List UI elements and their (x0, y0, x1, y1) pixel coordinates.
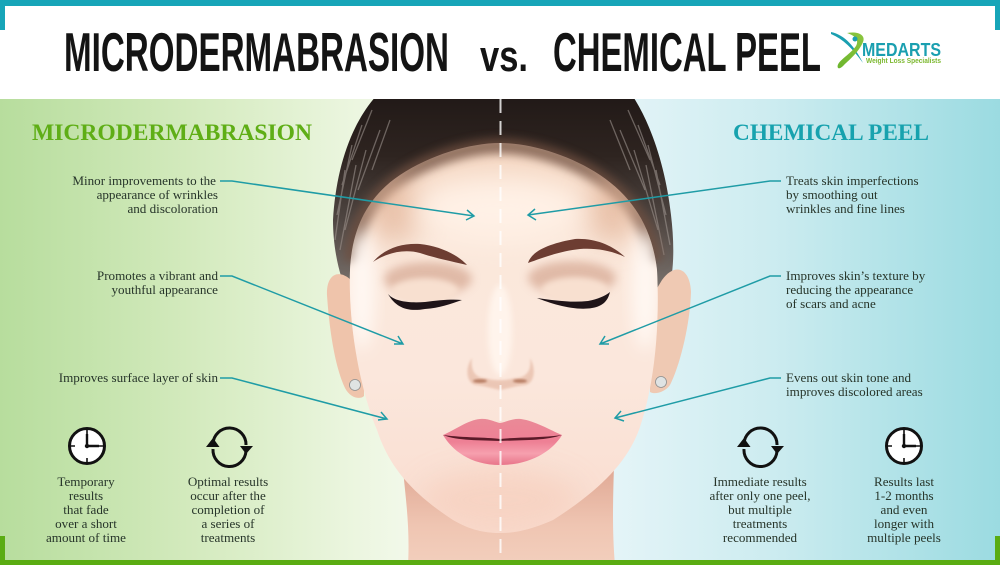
right ear (650, 270, 691, 393)
text: left benefit 1: appearance of wrinkles (97, 187, 218, 202)
text: optimal results: treatments (201, 530, 255, 545)
arrow: right 1 (528, 181, 781, 220)
logo: Medarts: MEDARTS (862, 40, 941, 60)
text: right benefit 2: of scars and acne (786, 296, 876, 311)
left ear (327, 274, 364, 398)
text: immediate results: recommended (723, 530, 798, 545)
eyelid right (541, 275, 608, 296)
nose (467, 285, 534, 390)
text: optimal results: Optimal results (188, 474, 268, 489)
text: results last: longer with (874, 516, 934, 531)
heading: microdermabrasion: MICRODERMABRASION (32, 120, 312, 145)
icon: cycle right (737, 428, 784, 467)
right earring (656, 376, 666, 388)
text: optimal results: completion of (191, 502, 265, 517)
frame: bottom green bracket (0, 536, 1000, 565)
icon: cycle left (206, 428, 253, 467)
soft hairline (352, 146, 655, 262)
logo: Medarts: Weight Loss Specialists (866, 58, 941, 65)
arrow: left 3 (220, 378, 387, 420)
panel: left green background (0, 99, 420, 565)
title: CHEMICAL PEEL (553, 21, 821, 83)
text: results last: multiple peels (867, 530, 941, 545)
frame: top teal bracket (0, 0, 1000, 30)
eye shadow left (384, 262, 472, 296)
text: immediate results: after only one peel, (709, 488, 811, 503)
text: right benefit 3: Evens out skin tone and (786, 370, 912, 385)
text: temporary results: Temporary (57, 474, 115, 489)
text: right benefit 1: wrinkles and fine lines (786, 201, 905, 216)
text: right benefit 1: Treats skin imperfections (786, 173, 919, 188)
text: left benefit 1: Minor improvements to the (72, 173, 216, 188)
eyelid left (392, 276, 459, 298)
text: results last: 1-2 months (874, 488, 934, 503)
title: vs. (480, 32, 528, 81)
left earring (350, 380, 360, 390)
logo: Medarts (831, 32, 941, 68)
text: optimal results: a series of (201, 516, 255, 531)
header band (0, 0, 1000, 99)
text: right benefit 2: reducing the appearance (786, 282, 913, 297)
text: left benefit 3: Improves surface layer of skin (59, 370, 218, 385)
neck (404, 470, 614, 560)
text: right benefit 2: Improves skin’s texture by (786, 268, 926, 283)
hair (333, 95, 673, 298)
text: immediate results: Immediate results (713, 474, 807, 489)
icon: clock right (886, 428, 922, 464)
text: right benefit 1: by smoothing out (786, 187, 878, 202)
icon: clock left (70, 428, 104, 464)
text: right benefit 3: improves discolored areas (786, 384, 923, 399)
text: left benefit 1: and discoloration (127, 201, 218, 216)
text: temporary results: over a short (55, 516, 117, 531)
face (350, 143, 658, 533)
arrow: left 1 (220, 181, 474, 220)
arrow: right 2 (600, 276, 781, 344)
title: MICRODERMABRASION (64, 21, 449, 83)
text: left benefit 2: youthful appearance (111, 282, 218, 297)
left closed eye (388, 294, 462, 310)
text: results last: and even (881, 502, 928, 517)
eye shadow right (528, 261, 616, 295)
right closed eye (537, 292, 610, 309)
heading: chemical peel: CHEMICAL PEEL (733, 120, 929, 145)
arrow: right 3 (615, 378, 781, 421)
left eyebrow (373, 244, 467, 265)
text: optimal results: occur after the (190, 488, 266, 503)
text: immediate results: treatments (733, 516, 787, 531)
arrow: left 2 (220, 276, 403, 344)
face shading (349, 176, 658, 530)
text: temporary results: results (69, 488, 103, 503)
face illustration (327, 95, 691, 565)
text: immediate results: but multiple (728, 502, 792, 517)
text: results last: Results last (874, 474, 934, 489)
panel: right blue background (580, 99, 1000, 565)
lips (443, 419, 562, 465)
centre dashed divider (500, 99, 502, 565)
text: temporary results: that fade (63, 502, 109, 517)
text: left benefit 2: Promotes a vibrant and (97, 268, 218, 283)
right eyebrow (528, 239, 625, 263)
text: temporary results: amount of time (46, 530, 126, 545)
